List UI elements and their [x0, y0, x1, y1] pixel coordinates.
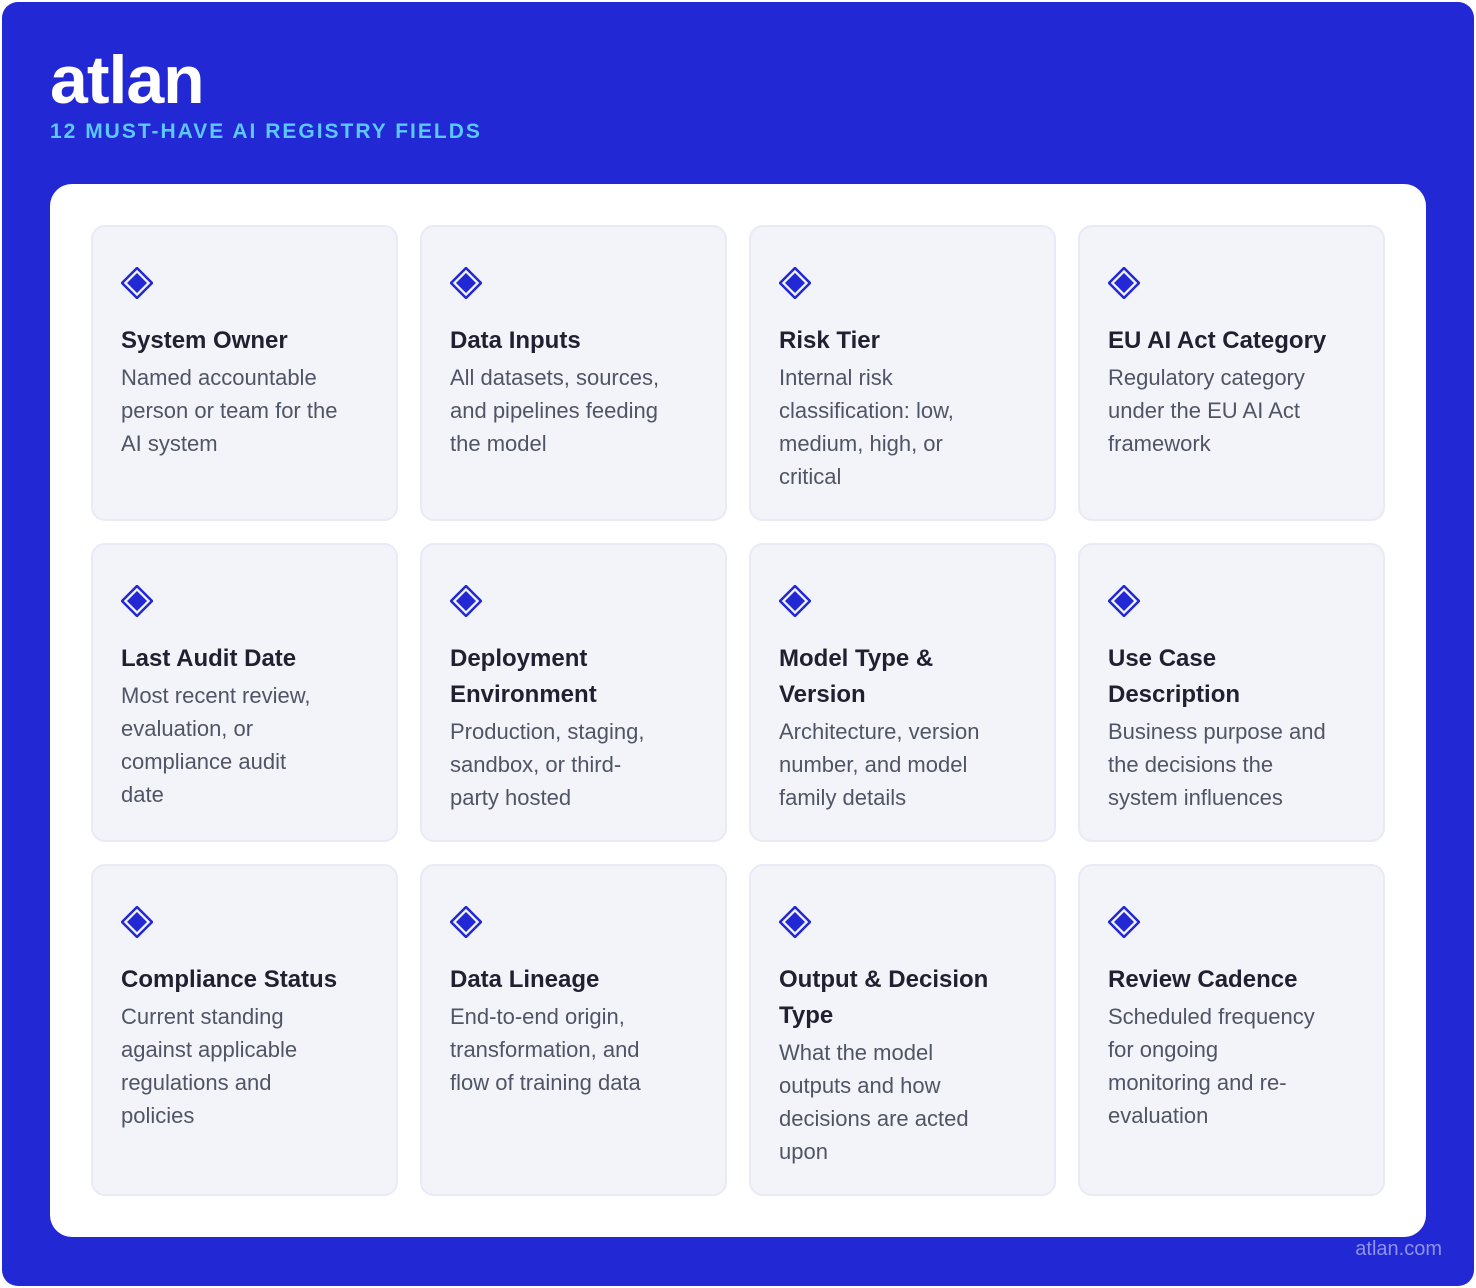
card: Output & Decision Type: outputs and how	[779, 1073, 940, 1098]
card: Model Type & Version: Architecture, version	[779, 719, 980, 744]
panel: fields grid	[50, 184, 1426, 1237]
card: Model Type & Version: Version	[779, 681, 866, 708]
subtitle: 12 MUST-HAVE AI REGISTRY FIELDS	[50, 120, 482, 143]
card: Use Case Description: Description	[1108, 681, 1240, 708]
card: Use Case Description	[1078, 543, 1385, 842]
card: EU AI Act Category: Regulatory category	[1108, 365, 1305, 390]
card: Compliance Status: policies	[121, 1103, 194, 1128]
card: Last Audit Date: Last Audit Date	[121, 645, 296, 672]
card: Last Audit Date	[91, 543, 398, 842]
card: Output & Decision Type: What the model	[779, 1040, 933, 1065]
card: Use Case Description: system influences	[1108, 785, 1283, 810]
card: Use Case Description: Use Case	[1108, 645, 1216, 672]
card: Risk Tier: Internal risk	[779, 365, 893, 390]
card: Risk Tier: Risk Tier	[779, 327, 880, 354]
card: EU AI Act Category: EU AI Act Category	[1108, 327, 1326, 354]
card: Deployment Environment: Production, staging,	[450, 719, 644, 744]
card: Review Cadence: Review Cadence	[1108, 966, 1297, 993]
card: Data Lineage	[420, 864, 727, 1196]
card: Output & Decision Type: Type	[779, 1002, 833, 1029]
card: EU AI Act Category	[1078, 225, 1385, 521]
card: Data Inputs: and pipelines feeding	[450, 398, 658, 423]
card: Last Audit Date: compliance audit	[121, 749, 286, 774]
card: Compliance Status: against applicable	[121, 1037, 297, 1062]
card: Deployment Environment: party hosted	[450, 785, 571, 810]
card: Deployment Environment: Deployment	[450, 645, 587, 672]
card: Risk Tier: medium, high, or	[779, 431, 943, 456]
card: Review Cadence: Scheduled frequency	[1108, 1004, 1315, 1029]
card: Model Type & Version	[749, 543, 1056, 842]
card: Compliance Status: Current standing	[121, 1004, 284, 1029]
card: Review Cadence: evaluation	[1108, 1103, 1208, 1128]
card: Deployment Environment	[420, 543, 727, 842]
card: Data Inputs: All datasets, sources,	[450, 365, 659, 390]
card: EU AI Act Category: under the EU AI Act	[1108, 398, 1300, 423]
card: Output & Decision Type	[749, 864, 1056, 1196]
card: Compliance Status: regulations and	[121, 1070, 271, 1095]
card: Data Inputs: the model	[450, 431, 547, 456]
card: Use Case Description: Business purpose and	[1108, 719, 1326, 744]
card: Review Cadence: monitoring and re-	[1108, 1070, 1287, 1095]
card: Compliance Status: Compliance Status	[121, 966, 337, 993]
card: Data Lineage: End-to-end origin,	[450, 1004, 625, 1029]
card: EU AI Act Category: framework	[1108, 431, 1211, 456]
card: Risk Tier: critical	[779, 464, 841, 489]
card: Model Type & Version: family details	[779, 785, 906, 810]
card: Last Audit Date: evaluation, or	[121, 716, 253, 741]
card: Risk Tier: classification: low,	[779, 398, 954, 423]
logo: atlan	[50, 42, 204, 118]
card: Review Cadence: for ongoing	[1108, 1037, 1218, 1062]
card: Model Type & Version: number, and model	[779, 752, 967, 777]
card: Data Inputs: Data Inputs	[450, 327, 581, 354]
card: Deployment Environment: sandbox, or third-	[450, 752, 621, 777]
card: Data Lineage: transformation, and	[450, 1037, 640, 1062]
card: Last Audit Date: Most recent review,	[121, 683, 311, 708]
card: Data Inputs	[420, 225, 727, 521]
card: Output & Decision Type: Output & Decision	[779, 966, 988, 993]
card: Risk Tier	[749, 225, 1056, 521]
card: Data Lineage: Data Lineage	[450, 966, 599, 993]
card: Output & Decision Type: upon	[779, 1139, 828, 1164]
footer: atlan.com: atlan.com	[1355, 1238, 1442, 1260]
card: Review Cadence	[1078, 864, 1385, 1196]
card: System Owner	[91, 225, 398, 521]
card: System Owner: Named accountable	[121, 365, 317, 390]
card: Model Type & Version: Model Type &	[779, 645, 933, 672]
card: Compliance Status	[91, 864, 398, 1196]
card: Last Audit Date: date	[121, 782, 164, 807]
card: Data Lineage: flow of training data	[450, 1070, 641, 1095]
card: System Owner: person or team for the	[121, 398, 337, 423]
card: System Owner: System Owner	[121, 327, 288, 354]
card: System Owner: AI system	[121, 431, 218, 456]
card: Use Case Description: the decisions the	[1108, 752, 1273, 777]
card: Deployment Environment: Environment	[450, 681, 597, 708]
card: Output & Decision Type: decisions are acted	[779, 1106, 969, 1131]
